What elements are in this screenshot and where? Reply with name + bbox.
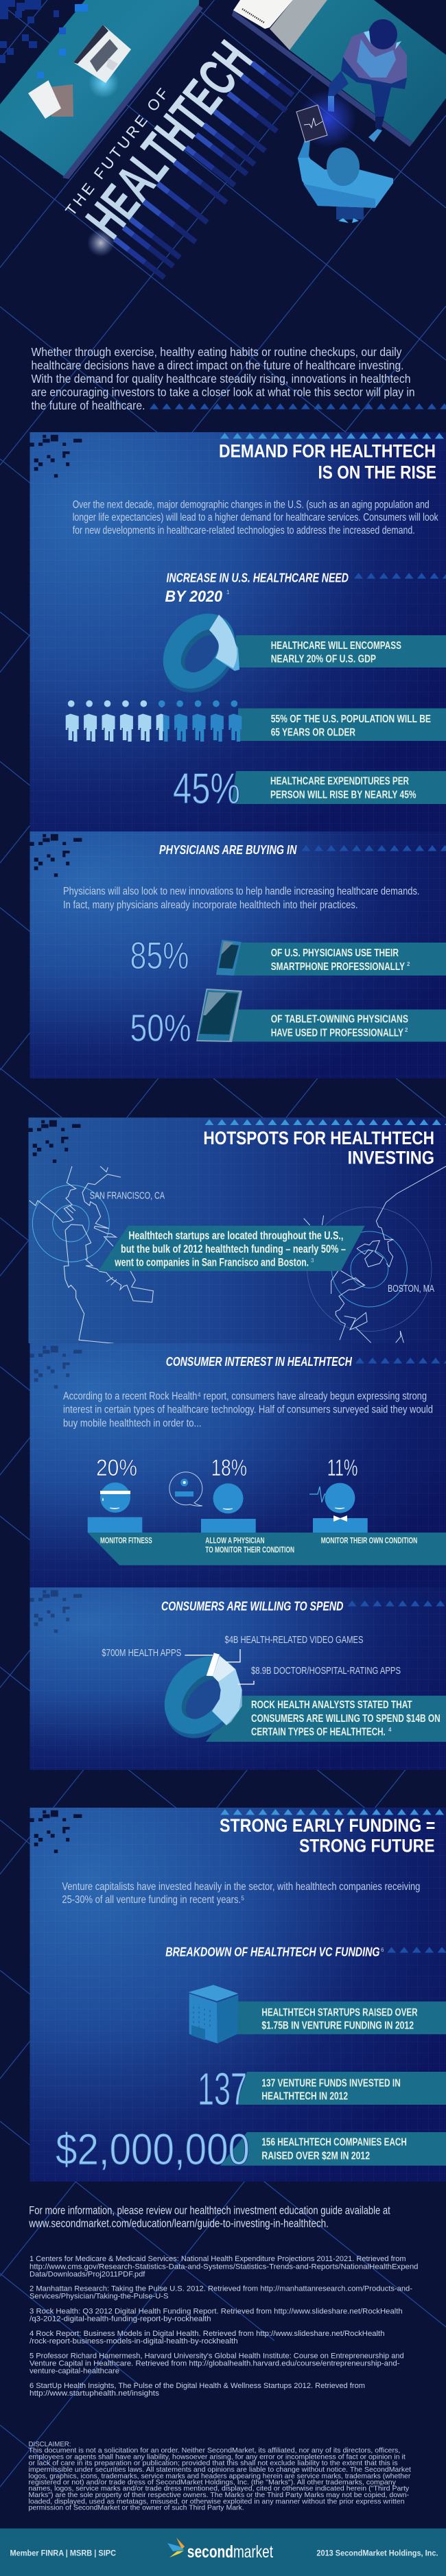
stat: tablet professionally: OF TABLET-OWNING PHYSICIANS: [271, 1014, 408, 1026]
callout: startups location: Healthtech startups are located throughout the U.S.,: [128, 1230, 343, 1242]
logo: secondmarket: market: [233, 2542, 273, 2562]
heading: demand for healthtech: [219, 441, 436, 482]
text: footnotes: http://www.cms.gov/Research-Statistics-Data-and-Systems/Statistics-Trends-and-Reports/NationalHealthExpend: [30, 2262, 419, 2271]
text: disclaimer: This document is not a solicitation for an order. Neither SecondMarket, its affiliated, nor any of its directors, officers,: [29, 2447, 400, 2455]
callout: startups location: 3: [311, 1257, 314, 1264]
heading: hotspots: [203, 1128, 434, 1168]
text: funding intro: [62, 1881, 420, 1906]
icon: papers: [28, 80, 73, 119]
icon: building: [188, 1985, 238, 2044]
stat: smartphone professionally: 2: [407, 961, 410, 967]
stat: smartphone professionally: OF U.S. PHYSICIANS USE THEIR: [271, 947, 399, 959]
stat: 11% monitor own condition: 11%: [327, 1455, 358, 1481]
text: disclaimer: logos, graphics, icons, trademarks, service marks and headers appearing herein are service marks, trademarks (whether: [29, 2472, 411, 2480]
stat: tablet professionally: [271, 1014, 408, 1039]
stat: tablet professionally: HAVE USED IT PROFESSIONALLY: [271, 1028, 403, 1039]
text: footnotes: 5 Professor Richard Hamermesh, Harvard University's Global Health Institute: Course on Entrepreneurship and: [30, 2352, 404, 2361]
logo: secondmarket: second: [187, 2542, 233, 2562]
number: $2,000,000: $2,000,000: [56, 2125, 250, 2174]
icon: standing physician: [328, 19, 407, 142]
icon: tablet with pulse: [296, 105, 327, 142]
subheading: increase in u.s. healthcare need by 2020: 1: [226, 589, 230, 595]
text: footnotes: Services/Physician/Taking-the-Pulse-U-S: [30, 2293, 168, 2301]
panel: physicians are buying in: [30, 831, 446, 1078]
text: disclaimer: or lack of care in its preparation or publication; provided that this shall not exclude liability to the extent that this is: [29, 2460, 398, 2468]
intro paragraph: Whether through exercise, healthy eating habits or routine checkups, our daily: [32, 345, 402, 359]
heading: strong early funding: [220, 1815, 435, 1856]
text: disclaimer: impermissible under securities laws. All statements and opinions are liable to change without notice. The SecondMarket: [29, 2466, 411, 2474]
stat: healthcare will encompass nearly 20%: HEALTHCARE WILL ENCOMPASS: [271, 640, 401, 652]
text: footnotes: Venture Capital in Healthcare. Retrieved from http://globalhealth.harvard.edu/course/entrepreneurship-and-: [30, 2360, 400, 2368]
callout: startups location: but the bulk of 2012 healthtech funding – nearly 50% –: [121, 1243, 346, 1255]
bar: tablet: [228, 1010, 446, 1041]
label: $700M health apps: $700M HEALTH APPS: [102, 1647, 181, 1659]
stat: rock health analysts: [251, 1699, 441, 1738]
label: san francisco: SAN FRANCISCO, CA: [90, 1190, 165, 1202]
text: disclaimer: employees or agents shall have any liability, howsoever arising, for any error or incompleteness of fact or opinion in it: [29, 2453, 406, 2461]
logo: secondmarket: [167, 2538, 273, 2562]
text: footnotes: venture-capital-healthcare: [30, 2367, 119, 2375]
callout: startups location: [98, 1226, 365, 1271]
map: boston: [304, 1166, 446, 1343]
text: footnotes: http://www.startuphealth.net/insights: [30, 2389, 160, 2398]
stat: 11% monitor own condition: [309, 1455, 417, 1545]
text: demand intro: [73, 499, 438, 536]
subheading: increase in u.s. healthcare need by 2020: INCREASE IN U.S. HEALTHCARE NEED: [166, 571, 349, 584]
number: 85%: 85%: [130, 934, 189, 977]
text: consumer intro: buy mobile healthtech in order to...: [63, 1417, 202, 1429]
text: footnotes: 1 Centers for Medicare & Medicaid Services: National Health Expenditure Projections 2011-2021. Retrieved from: [30, 2255, 406, 2263]
bar: smartphone: [231, 943, 446, 976]
text: footnotes: 6 StartUp Health Insights, The Pulse of the Digital Health & Wellness Startups 2012. Retrieved from: [30, 2382, 365, 2390]
text: physicians intro: [63, 886, 420, 911]
number: 50%: 50%: [130, 1006, 191, 1050]
label: $8.9B rating apps: $8.9B DOCTOR/HOSPITAL-RATING APPS: [251, 1665, 401, 1677]
text: footnotes: /q3-2012-digital-health-funding-report-by-rockhealth: [30, 2315, 211, 2323]
stat: 156 companies: RAISED OVER $2M IN 2012: [261, 2150, 370, 2162]
text: footnotes: 2 Manhattan Research: Taking the Pulse U.S. 2012. Retrieved from http://manhattanresearch.com/Products-and-: [30, 2284, 412, 2293]
panel: hotspots for healthtech investing: [29, 1118, 446, 1343]
text: disclaimer: names, logos, service marks and/or trade dress mentioned, displayed, cited or otherwise indicated herein ("Third Party: [29, 2485, 410, 2493]
stat: 18% allow a physician: [169, 1455, 294, 1555]
footer bar: [0, 2529, 446, 2576]
stat: healthcare expenditures: [270, 775, 416, 801]
bar: 55 percent population: [238, 708, 446, 741]
icon: right desk: [232, 0, 446, 147]
text: physicians intro: In fact, many physicians already incorporate healthtech into their practices.: [63, 899, 358, 911]
text: footnotes: /rock-report-business-models-in-digital-health-by-rockhealth: [30, 2337, 238, 2345]
chart: spending donut: [149, 1642, 256, 1753]
stat: 20% monitor fitness: MONITOR FITNESS: [100, 1537, 152, 1545]
stat: 18% allow a physician: ALLOW A PHYSICIAN: [205, 1537, 265, 1545]
stat: healthcare will encompass nearly 20%: NEARLY 20% OF U.S. GDP: [271, 654, 376, 665]
text: copyright: 2013 SecondMarket Holdings, Inc.: [316, 2549, 438, 2558]
text: consumer intro: [63, 1391, 433, 1429]
text: disclaimer: permission of SecondMarket or the owner of such Third Party Mark.: [29, 2504, 244, 2512]
text: footnotes: 4 Rock Report: Business Models in Digital Health. Retrieved from http://www.slideshare.net/RockHealth: [30, 2330, 384, 2338]
stat: healthcare will encompass nearly 20%: [271, 640, 401, 665]
subheading: breakdown of vc funding: 6: [381, 1947, 384, 1953]
text: more information: www.secondmarket.com/education/learn/guide-to-investing-in-healthtech.: [29, 2217, 329, 2230]
bar: venture funds: [236, 2072, 446, 2105]
icon: smartphone: [216, 940, 242, 976]
map: san francisco: [30, 1166, 153, 1343]
bar: 45 percent: [231, 771, 446, 804]
stat: 156 companies: [261, 2137, 407, 2162]
stat: rock health analysts: CERTAIN TYPES OF HEALTHTECH.: [251, 1726, 386, 1738]
subheading: breakdown of vc funding: BREAKDOWN OF HEALTHTECH VC FUNDING: [165, 1945, 380, 1959]
text: more information: [29, 2203, 390, 2230]
icon: pixel squares: [0, 0, 88, 78]
bar: startups raised: [236, 2002, 446, 2034]
icon: tablet: [196, 989, 242, 1042]
text: disclaimer: loaded, displayed, used as metatags, misused, or otherwise exploited in any manner without the prior express written: [29, 2498, 405, 2505]
number: 137: 137: [198, 2064, 247, 2115]
text: disclaimer: DISCLAIMER:: [29, 2441, 71, 2448]
intro paragraph: healthcare decisions have a direct impact on the future of healthcare investing.: [32, 358, 403, 372]
bar: rock health: [206, 1696, 446, 1742]
number: 45%: 45%: [173, 765, 240, 813]
intro paragraph: With the demand for quality healthcare steadily rising, innovations in healthtech: [32, 372, 410, 386]
triangle row: [150, 403, 446, 410]
title shadow stripes: [113, 61, 305, 281]
text: footnotes: Data/Downloads/Proj2011PDF.pdf: [30, 2270, 145, 2278]
icon: left desk: [0, 0, 214, 179]
subheading: increase in u.s. healthcare need by 2020: BY 2020: [165, 587, 222, 605]
chart: people row: [66, 700, 242, 742]
stat: smartphone professionally: [271, 947, 410, 973]
title: the future of: THE FUTURE OF: [62, 85, 172, 219]
heading: hotspots: INVESTING: [348, 1147, 434, 1168]
stat: smartphone professionally: SMARTPHONE PROFESSIONALLY: [271, 961, 405, 973]
subheading: consumer interest: CONSUMER INTEREST IN HEALTHTECH: [166, 1354, 352, 1369]
icon: seated doctor: [298, 134, 393, 223]
stat: 137 venture funds: 137 VENTURE FUNDS INVESTED IN: [261, 2078, 401, 2090]
subheading: physicians are buying in: PHYSICIANS ARE BUYING IN: [159, 843, 297, 857]
stat: 20% monitor fitness: [88, 1455, 152, 1545]
panel: strong early funding: [30, 1808, 446, 2182]
text: member finra: Member FINRA | MSRB | SIPC: [10, 2549, 116, 2558]
label: $4B video games: $4B HEALTH-RELATED VIDEO GAMES: [225, 1634, 363, 1646]
subheading: physicians are buying in: [159, 843, 446, 857]
text: footnotes: [30, 2255, 419, 2398]
text: disclaimer: registered or not) and/or trade dress of SecondMarket Holdings, Inc. (the "Marks"). All other trademarks, company: [29, 2479, 397, 2486]
subheading: willing to spend: CONSUMERS ARE WILLING TO SPEND: [161, 1598, 343, 1613]
label: $8.9B rating apps: [238, 1665, 401, 1684]
stat: startups raised over 1.75b: [261, 2007, 418, 2032]
stat: 20% monitor fitness: 20%: [96, 1455, 137, 1481]
panel: consumer interest in healthtech: [30, 1343, 446, 1587]
icon: laptop: [73, 25, 131, 98]
text: funding intro: 25-30% of all venture funding in recent years.⁵: [62, 1894, 244, 1906]
bar: companies raised: [220, 2132, 446, 2166]
text: footnotes: 3 Rock Health: Q3 2012 Digital Health Funding Report. Retrieved from http://www.slideshare.net/RockHealth: [30, 2307, 403, 2315]
bar: 20 percent of gdp: [232, 635, 446, 667]
text: disclaimer: Marks") are the sole property of their respective owners. The Marks or the Third Party Marks may not be copied, down-: [29, 2492, 409, 2499]
stat: 18% allow a physician: 18%: [211, 1455, 247, 1481]
chart: gdp donut: [148, 599, 251, 707]
panel: consumers are willing to spend: [30, 1587, 446, 1770]
intro paragraph: [32, 345, 414, 412]
bar: consumer labels: [88, 1533, 446, 1565]
label: $4B video games: [225, 1634, 363, 1662]
subheading: increase in u.s. healthcare need by 2020: [165, 571, 446, 605]
stat: 137 venture funds: [261, 2078, 401, 2103]
text: disclaimer: [29, 2441, 411, 2512]
panel: demand for healthtech: [30, 432, 446, 831]
stat: 55% population 65 or older: [271, 713, 431, 739]
hero illustration: [0, 0, 446, 281]
stat: 55% population 65 or older: 65 YEARS OR OLDER: [271, 727, 355, 739]
intro paragraph: the future of healthcare.: [32, 399, 145, 412]
stat: 18% allow a physician: TO MONITOR THEIR CONDITION: [205, 1546, 294, 1555]
stat: rock health analysts: 4: [388, 1727, 392, 1733]
callout: startups location: went to companies in San Francisco and Boston.: [115, 1257, 309, 1269]
icon: printer device: [233, 0, 327, 50]
stat: tablet professionally: 2: [405, 1027, 408, 1033]
stat: 137 venture funds: HEALTHTECH IN 2012: [261, 2091, 348, 2103]
